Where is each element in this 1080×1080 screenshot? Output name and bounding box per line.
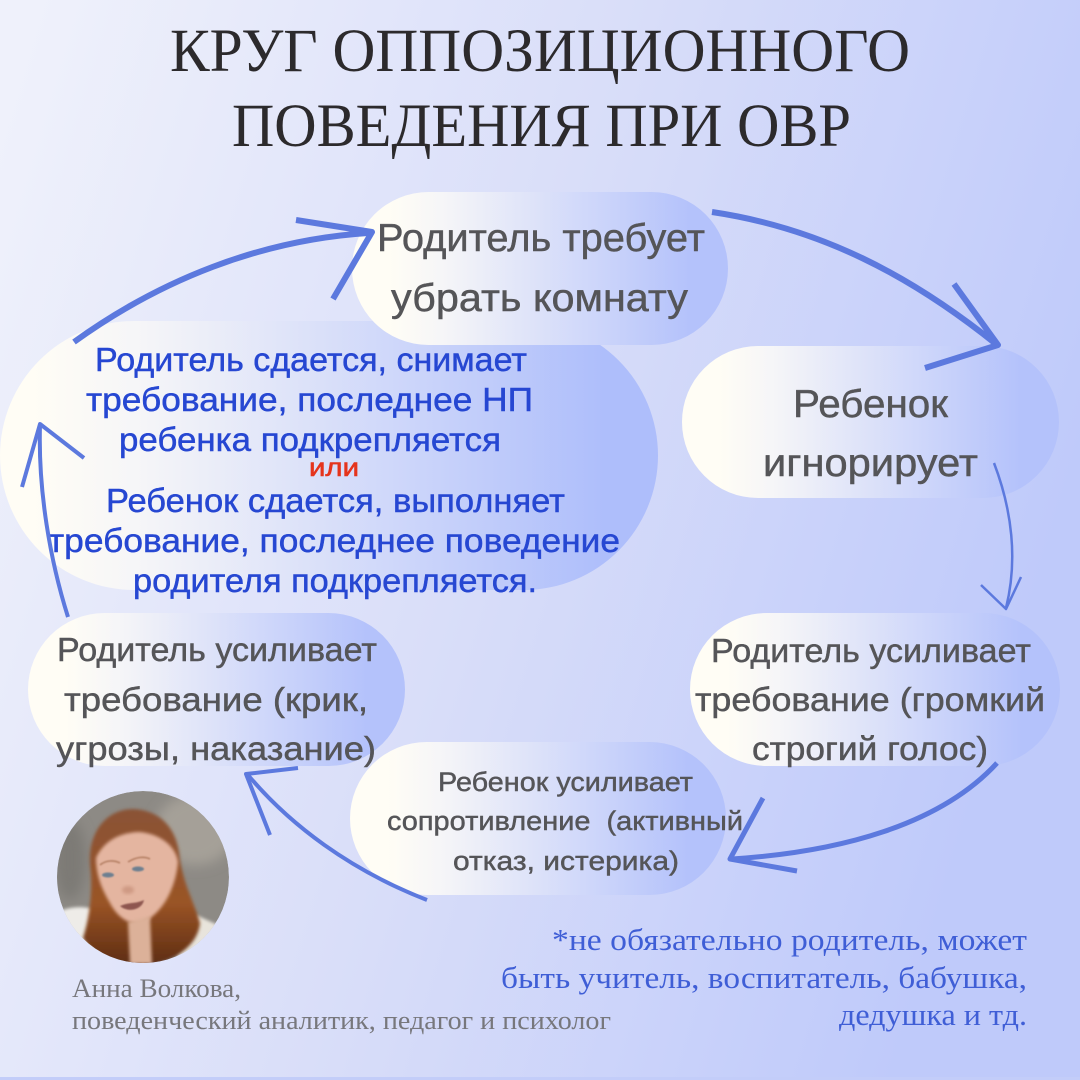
author caption: Анна Волкова, [72,974,241,1003]
author caption: поведенческий аналитик, педагог и психолог [72,1006,611,1035]
panel: child escalates resistance: сопротивление (активный [387,806,743,836]
panel: child ignores [682,346,1059,498]
panel: parent demands: Родитель требует [377,217,705,260]
panel: parent escalates, loud voice: строгий голос) [752,730,988,767]
panel: parent escalates, loud voice: Родитель усиливает [711,632,1031,669]
title [170,18,910,160]
bottom strip [0,1077,1080,1080]
author caption [72,974,611,1035]
footnote: *не обязательно родитель, может [552,922,1027,957]
panel: parent demands: убрать комнату [391,277,689,320]
panel: parent gives up or child gives up: ребенка подкрепляется [119,421,501,458]
panel: parent gives up or child gives up: родителя подкрепляется. [133,562,537,599]
footnote: дедушка и тд. [839,997,1027,1032]
panel: parent gives up or child gives up: требование, последнее поведение [48,522,620,559]
panel: parent gives up or child gives up: или [309,454,359,482]
panel: parent escalates, loud voice: требование (громкий [695,681,1045,718]
panel: child escalates resistance: Ребенок усиливает [438,767,693,797]
arrow: parent escalates to child resists [730,763,997,871]
panel: parent gives up or child gives up: требование, последнее НП [86,381,533,418]
title: КРУГ ОППОЗИЦИОННОГО [170,18,910,85]
panel: child escalates resistance [350,742,743,895]
arrow: parent demands to child ignores [712,212,998,368]
arrow: child ignores to parent escalates [981,463,1021,609]
arrow: parent escalates to outcome [22,424,84,617]
panel: parent escalates, threats [28,613,405,767]
panel: parent escalates, threats: угрозы, наказание) [56,730,376,767]
panel: parent gives up or child gives up: Родитель сдается, снимает [95,341,527,378]
footnote: быть учитель, воспитатель, бабушка, [501,960,1027,995]
panel: child ignores: игнорирует [763,442,978,485]
arrow: outcome back to parent demands [74,220,372,342]
panel: parent escalates, loud voice [690,613,1060,767]
panel: parent escalates, threats: требование (крик, [64,681,368,718]
panel: child ignores: Ребенок [793,383,949,426]
title: ПОВЕДЕНИЯ ПРИ ОВР [232,93,851,160]
portrait of Anna Volkova [50,791,235,966]
panel: parent gives up or child gives up: Ребенок сдается, выполняет [106,482,565,519]
panel: parent demands [352,192,728,345]
footnote [501,922,1027,1032]
panel: parent gives up or child gives up [0,321,658,599]
arrow: child resists to parent escalates [246,768,427,900]
panel: child escalates resistance: отказ, истерика) [453,846,679,876]
panel: parent escalates, threats: Родитель усиливает [57,631,377,668]
